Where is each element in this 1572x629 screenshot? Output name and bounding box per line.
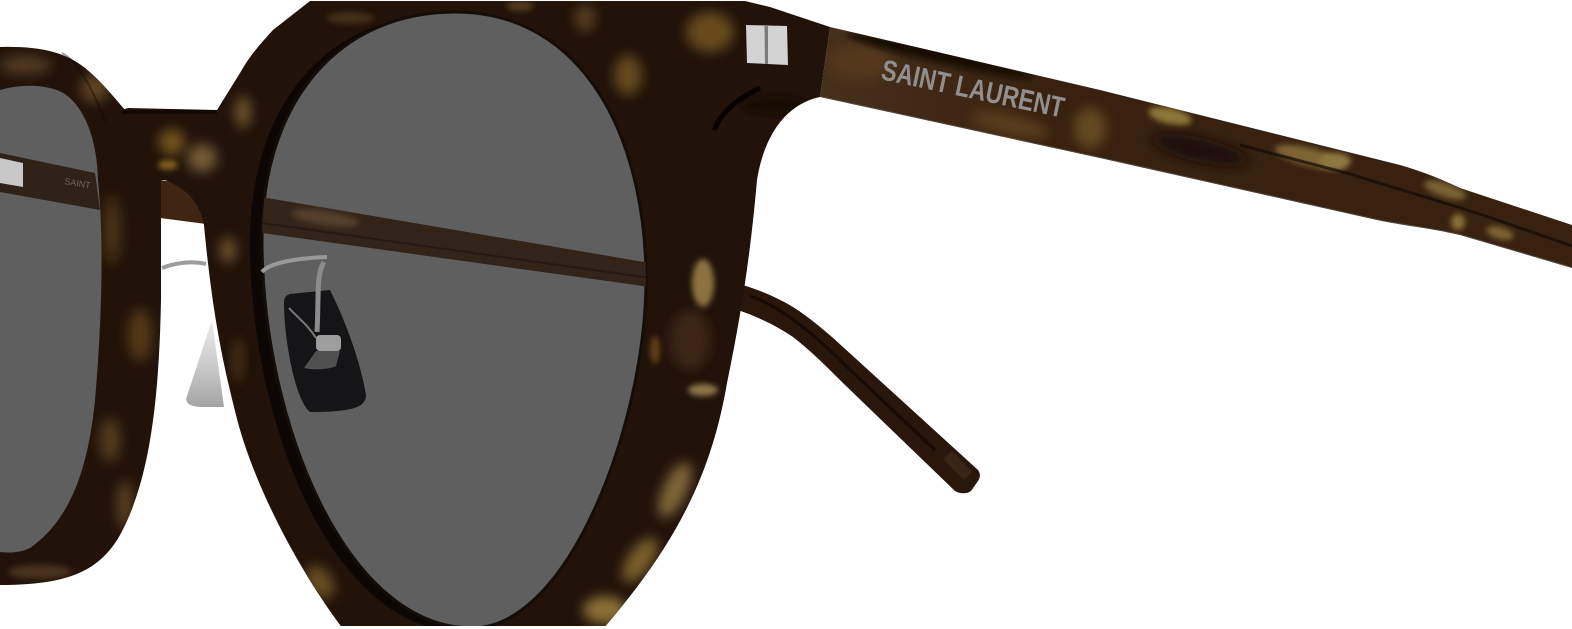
temple seen through the bridge arch: [160, 180, 206, 224]
far temple arm: [738, 285, 980, 493]
left lens frame: [0, 47, 161, 585]
inner temple seen through lens: [255, 196, 650, 287]
dark inner rim, heavier on the left side: [250, 26, 442, 626]
main lens: [255, 12, 650, 628]
hinge rivet: [746, 25, 788, 65]
temple arm with logo: [820, 27, 1572, 270]
left lens: SAINT: [64, 176, 92, 191]
main frame front with bridge: [115, 1, 830, 629]
right nose pad and wire: [262, 257, 366, 412]
logo text: SAINT LAURENT: [879, 55, 1067, 125]
left lens: [0, 86, 102, 553]
nose bridge metal wire and left nose pad: [162, 262, 224, 407]
white strip below the photo: [0, 626, 1572, 629]
